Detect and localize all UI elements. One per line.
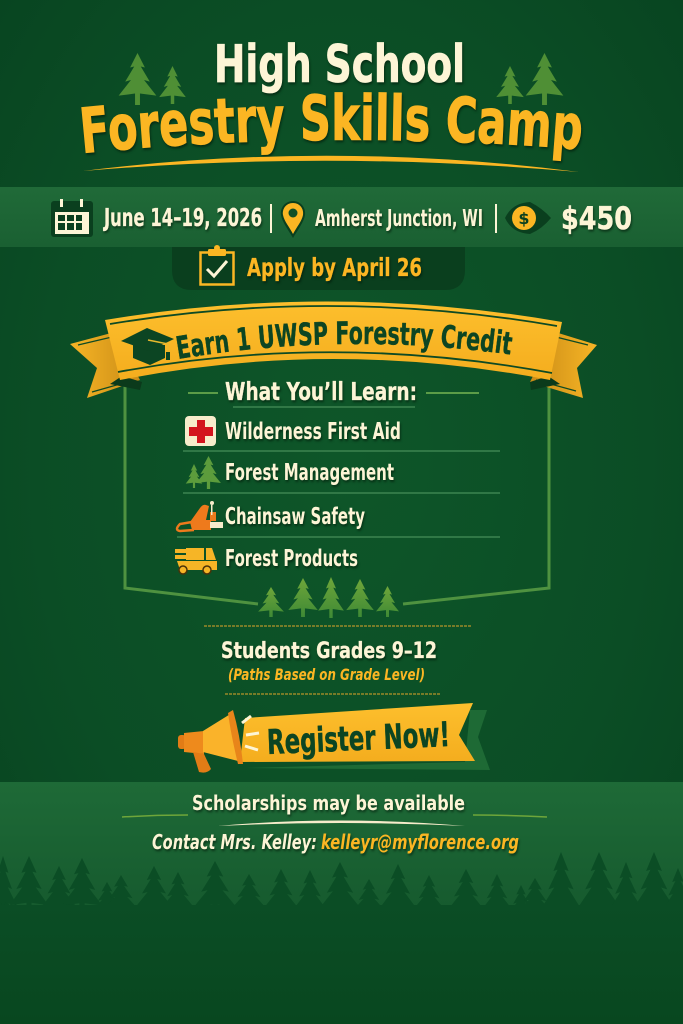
icon: megaphone (178, 710, 259, 773)
banner body (240, 703, 475, 762)
apply deadline pill (172, 245, 465, 290)
icon: row of pine trees (258, 577, 399, 618)
icon: left pine trees (119, 53, 186, 105)
tree line silhouette (0, 852, 683, 920)
price: $450 (561, 201, 632, 237)
deadline text: Apply by April 26 (247, 253, 422, 282)
title (81, 35, 583, 172)
banner text: Register Now! (266, 715, 451, 763)
list item: chainsaw safety: Chainsaw Safety (225, 504, 365, 530)
contact: Contact Mrs. Kelley: (152, 830, 317, 854)
icon: graduation cap (121, 328, 174, 365)
scholarships: Scholarships may be available (192, 791, 465, 815)
list item: forest products (175, 546, 358, 574)
icon: right pine trees (496, 53, 563, 105)
forest floor (0, 905, 683, 1024)
right ribbon tail (530, 332, 597, 398)
icon: calendar (51, 199, 93, 237)
icon: clipboard check (200, 245, 234, 284)
ribbon body (105, 301, 562, 380)
ribbon text: Earn 1 UWSP Forestry Credit (176, 321, 513, 359)
icon: trees (186, 456, 221, 489)
title swoosh (83, 156, 579, 172)
credit ribbon (70, 302, 597, 398)
list item: forest products: Forest Products (225, 546, 358, 572)
icon: dollar coin (505, 202, 551, 234)
info band (0, 187, 683, 247)
list item: forest management (186, 456, 394, 489)
location: Amherst Junction, WI (315, 206, 483, 232)
icon: dollar coin: $ (518, 209, 530, 228)
list item: wilderness first aid (185, 416, 401, 446)
audience section (204, 626, 472, 694)
paths note: (Paths Based on Grade Level) (228, 665, 425, 684)
grades: Students Grades 9–12 (221, 639, 437, 664)
panel: what you'll learn frame (125, 382, 549, 604)
email: kelleyr@myflorence.org (321, 830, 519, 854)
icon: first aid cross (185, 416, 216, 446)
heading: Forestry Skills Camp: Forestry Skills Camp (81, 92, 583, 164)
list item: chainsaw safety (177, 501, 365, 531)
icon: log truck (175, 548, 217, 574)
list item: forest management: Forest Management (225, 460, 394, 486)
heading: High School: High School (214, 35, 465, 95)
learn heading: What You’ll Learn: (225, 377, 417, 406)
list item: wilderness first aid: Wilderness First Aid (225, 419, 401, 445)
register banner (178, 703, 490, 773)
icon: chainsaw (177, 501, 223, 531)
footer band (0, 782, 683, 912)
left ribbon tail (70, 332, 140, 398)
date: June 14–19, 2026 (103, 203, 262, 232)
icon: map pin (281, 201, 305, 238)
